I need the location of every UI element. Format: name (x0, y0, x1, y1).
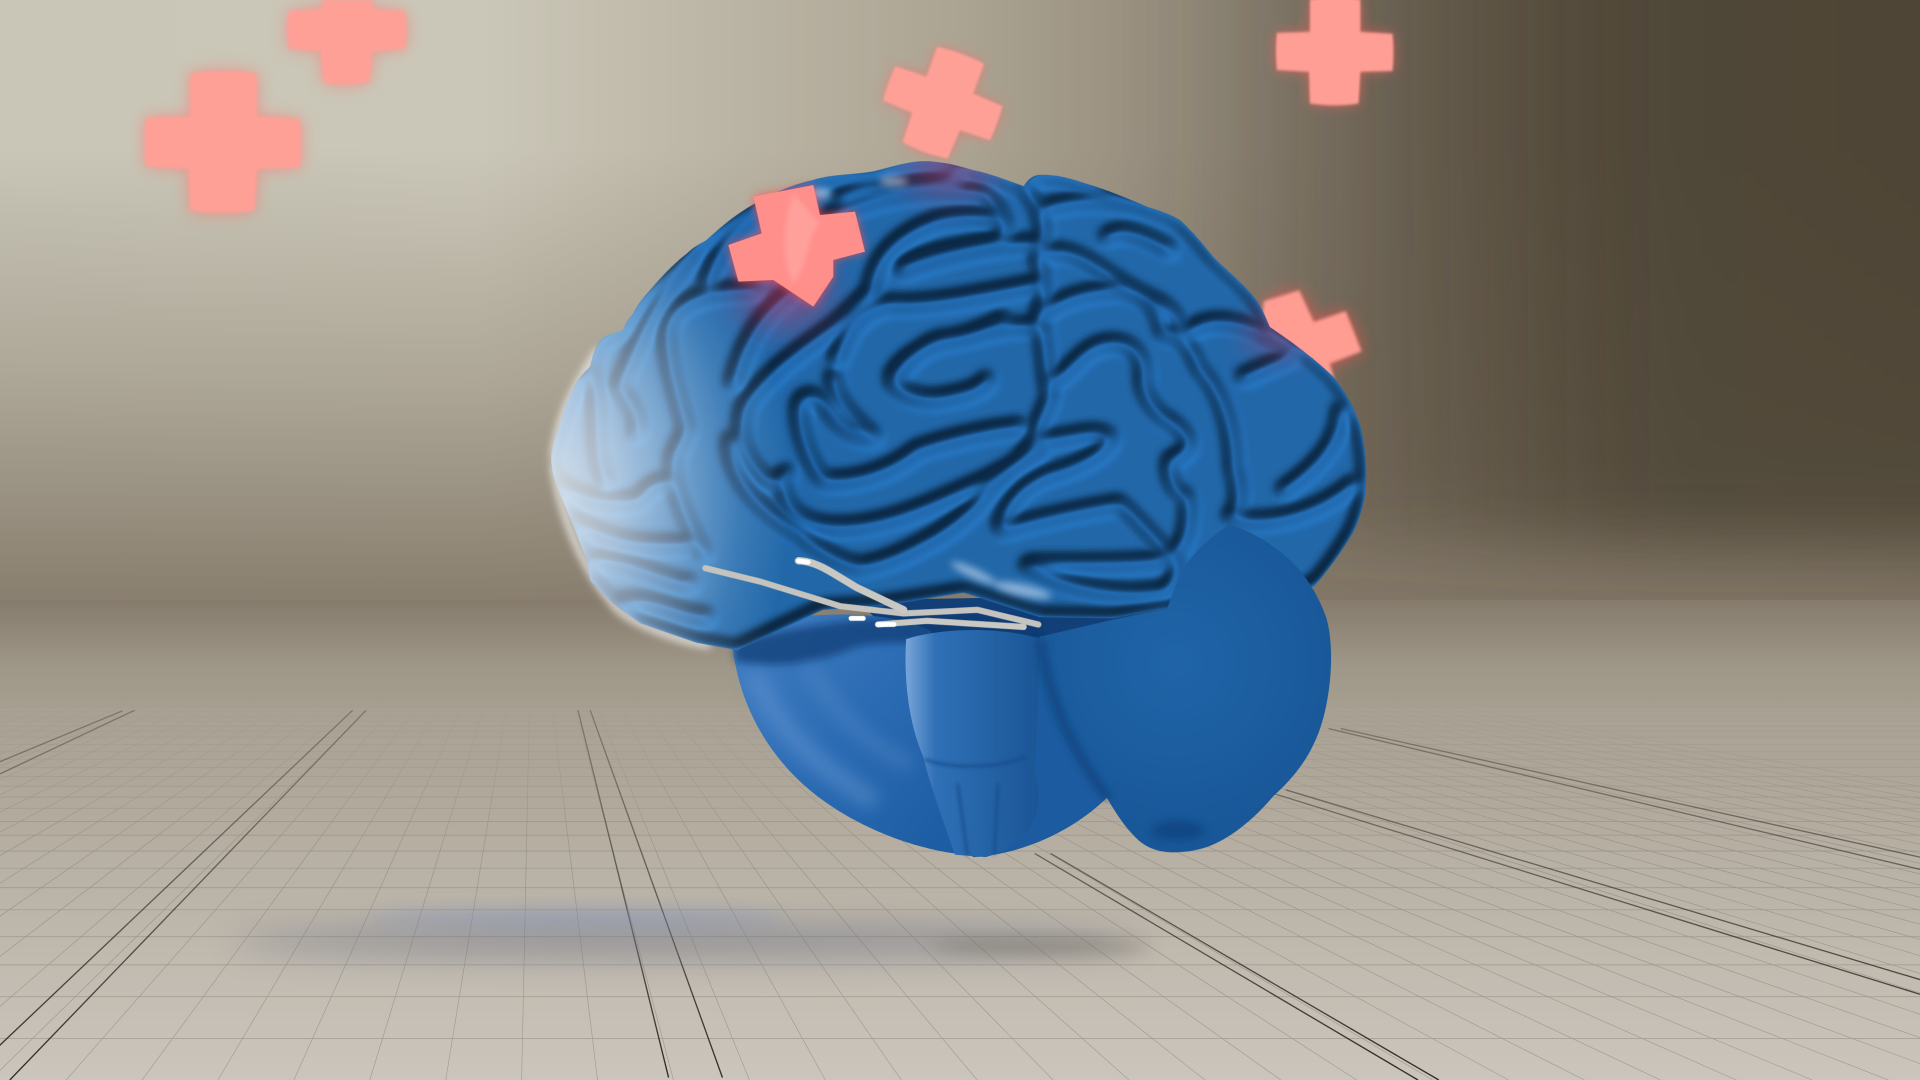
cross: behind brain right (1261, 290, 1362, 380)
cross: top left small (287, 0, 407, 85)
floating medical crosses (144, 0, 1393, 380)
cerebrum embossed surface (551, 161, 1366, 650)
medial lobe right of stem (955, 637, 1120, 857)
red glow from crosses on brain (737, 144, 1314, 353)
cerebrum underside highlights (809, 176, 1052, 602)
dark backing behind vessels (857, 594, 1224, 784)
brain stem ridges (924, 757, 1026, 855)
lower temporal lobe (731, 614, 980, 853)
blood vessels (705, 561, 1038, 627)
shadow under cerebrum (735, 614, 1041, 665)
background wall (0, 0, 1920, 618)
cross: top left large (144, 71, 301, 213)
cerebellum crease (1041, 639, 1205, 840)
brain stem (906, 630, 1041, 857)
lower lobe highlight (753, 667, 912, 802)
cerebellum (1040, 524, 1331, 852)
brain (527, 135, 1396, 857)
floor with grid lines (0, 549, 1920, 1080)
white rim glow (553, 349, 710, 645)
cross: top right (1276, 0, 1393, 105)
floor shadow of brain (233, 909, 1151, 958)
crease shading (667, 187, 1344, 591)
front cross embedded in the brain (728, 185, 865, 307)
cross: top centre (870, 34, 1015, 172)
left side light wash (551, 250, 776, 650)
